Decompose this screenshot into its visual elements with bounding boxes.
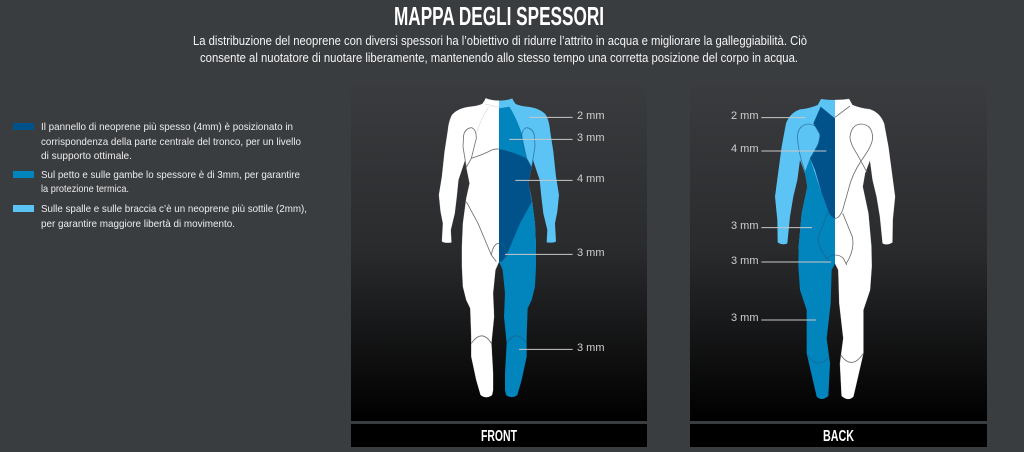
callout: 4 mm torso: 4 mm [577,173,604,185]
front coloured half [499,98,559,398]
callout: 3 mm leg [731,312,816,324]
callout: 3 mm hip: 3 mm [731,220,758,232]
callout: 2 mm shoulder: 2 mm [577,110,604,122]
callout: 3 mm chest: 3 mm [577,132,604,144]
legend item: 2 mm [13,203,307,230]
callout: 3 mm leg: 3 mm [577,342,604,354]
callout: 3 mm crotch: 3 mm [731,255,758,267]
front white half [439,98,499,397]
callout: 2 mm shoulder [731,110,805,122]
front wetsuit figure [438,98,559,398]
callout: 3 mm crotch [731,255,831,267]
legend item: 4 mm: corrispondenza della parte centrale del tronco, per un livello [41,136,301,148]
callout: 3 mm hip [505,247,604,259]
front panel background [351,76,647,421]
back wetsuit figure [775,98,896,400]
front seams [463,104,535,343]
back label bar [690,424,987,447]
panel: back [690,76,987,447]
legend item: 4 mm: di supporto ottimale. [41,150,132,162]
front label bar: FRONT [481,428,517,445]
legend item: 3 mm: Sul petto e sulle gambe lo spessore è di 3mm, per garantire [41,169,300,181]
callout: 3 mm hip: 3 mm [577,247,604,259]
legend item: 2 mm: Sulle spalle e sulle braccia c’è un neoprene più sottile (2mm), [41,203,307,215]
callout: 4 mm torso: 4 mm [731,143,758,155]
legend item: 3 mm [13,169,300,195]
callout: 3 mm chest [509,132,604,144]
back coloured half [775,99,835,399]
legend item: 3 mm: la protezione termica. [41,183,129,195]
callout: 3 mm leg [519,342,604,354]
front label bar [351,424,647,447]
back label bar: BACK [823,428,854,445]
intro text: La distribuzione del neoprene con diversi spessori ha l’obiettivo di ridurre l’attrito in acqua e migliorare la galleggiabilità. Ciò [193,34,807,48]
back panel background [690,76,987,421]
front callouts [505,110,604,354]
legend [13,121,307,230]
callout: 4 mm torso [731,143,826,155]
back white half [835,99,895,399]
callout: 2 mm shoulder: 2 mm [731,110,758,122]
legend item: 2 mm: per garantire maggiore libertà di movimento. [41,218,235,230]
legend item: 4 mm: Il pannello di neoprene più spesso (4mm) è posizionato in [41,121,293,133]
callout: 3 mm hip [731,220,812,232]
callout: 3 mm leg: 3 mm [731,312,758,324]
intro text: consente al nuotatore di nuotare liberamente, mantenendo allo stesso tempo una corretta posizione del corpo in acqua. [200,51,798,65]
callout: 4 mm torso [515,173,604,185]
callout: 2 mm shoulder [529,110,604,122]
legend item: 4 mm [13,121,301,162]
back callouts [731,110,831,324]
panel: front [351,76,647,447]
intro text [193,34,807,65]
back seams [797,106,873,363]
title: MAPPA DEGLI SPESSORI [394,1,604,31]
